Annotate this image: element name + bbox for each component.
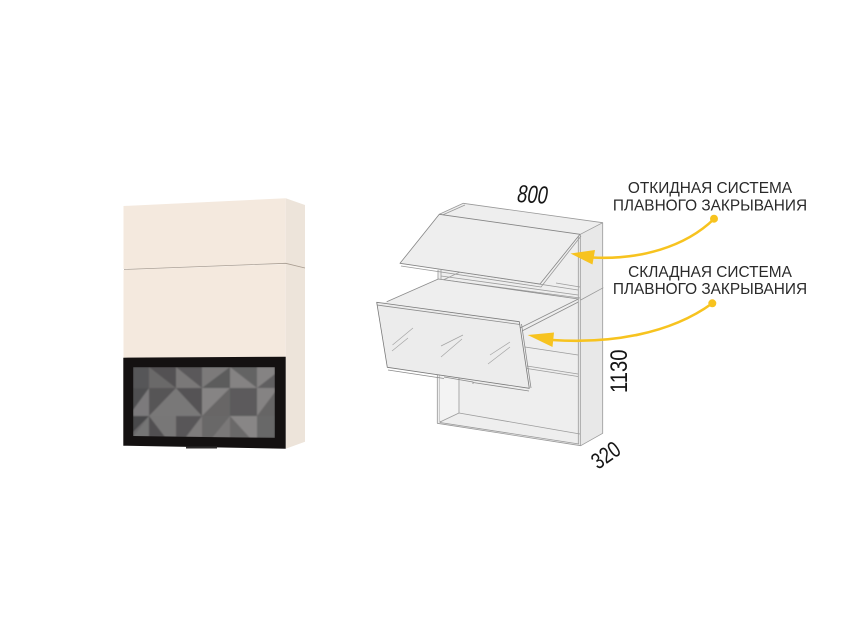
upper cream door xyxy=(124,198,286,269)
lower compartment white opening xyxy=(440,372,458,421)
door handle xyxy=(186,446,217,448)
label: folding soft-close system second line: ПЛАВНОГО ЗАКРЫВАНИЯ xyxy=(613,281,807,298)
cabinet body xyxy=(437,203,603,446)
dimension: depth 320: 320 xyxy=(587,437,626,475)
label: folding soft-close system: СКЛАДНАЯ СИСТЕМА xyxy=(628,264,793,281)
photo: closed wall cabinet xyxy=(123,198,305,449)
dimension: width 800: 800 xyxy=(515,180,551,209)
door seam xyxy=(124,263,305,270)
cabinet side panel xyxy=(286,198,305,449)
lower compartment lines xyxy=(438,270,580,434)
cabinet side xyxy=(581,223,603,446)
arrow: folding system xyxy=(528,299,716,347)
dimension: height 1130: 1130 xyxy=(605,349,632,393)
patterned glass panel xyxy=(133,367,275,438)
black glass door frame xyxy=(123,357,286,449)
lower folding glass door xyxy=(377,302,531,391)
middle cream door xyxy=(124,264,286,358)
glass reflections xyxy=(392,328,510,364)
label: hinged soft-close system second line: ПЛАВНОГО ЗАКРЫВАНИЯ xyxy=(613,198,807,214)
upper flap door xyxy=(400,214,581,287)
label: hinged soft-close system: ОТКИДНАЯ СИСТЕМА xyxy=(628,180,793,197)
arrow: hinged system xyxy=(570,215,718,264)
cabinet outline xyxy=(437,203,603,446)
diagram: cabinet with open doors xyxy=(377,203,603,446)
lower folding door top panel xyxy=(377,279,578,331)
